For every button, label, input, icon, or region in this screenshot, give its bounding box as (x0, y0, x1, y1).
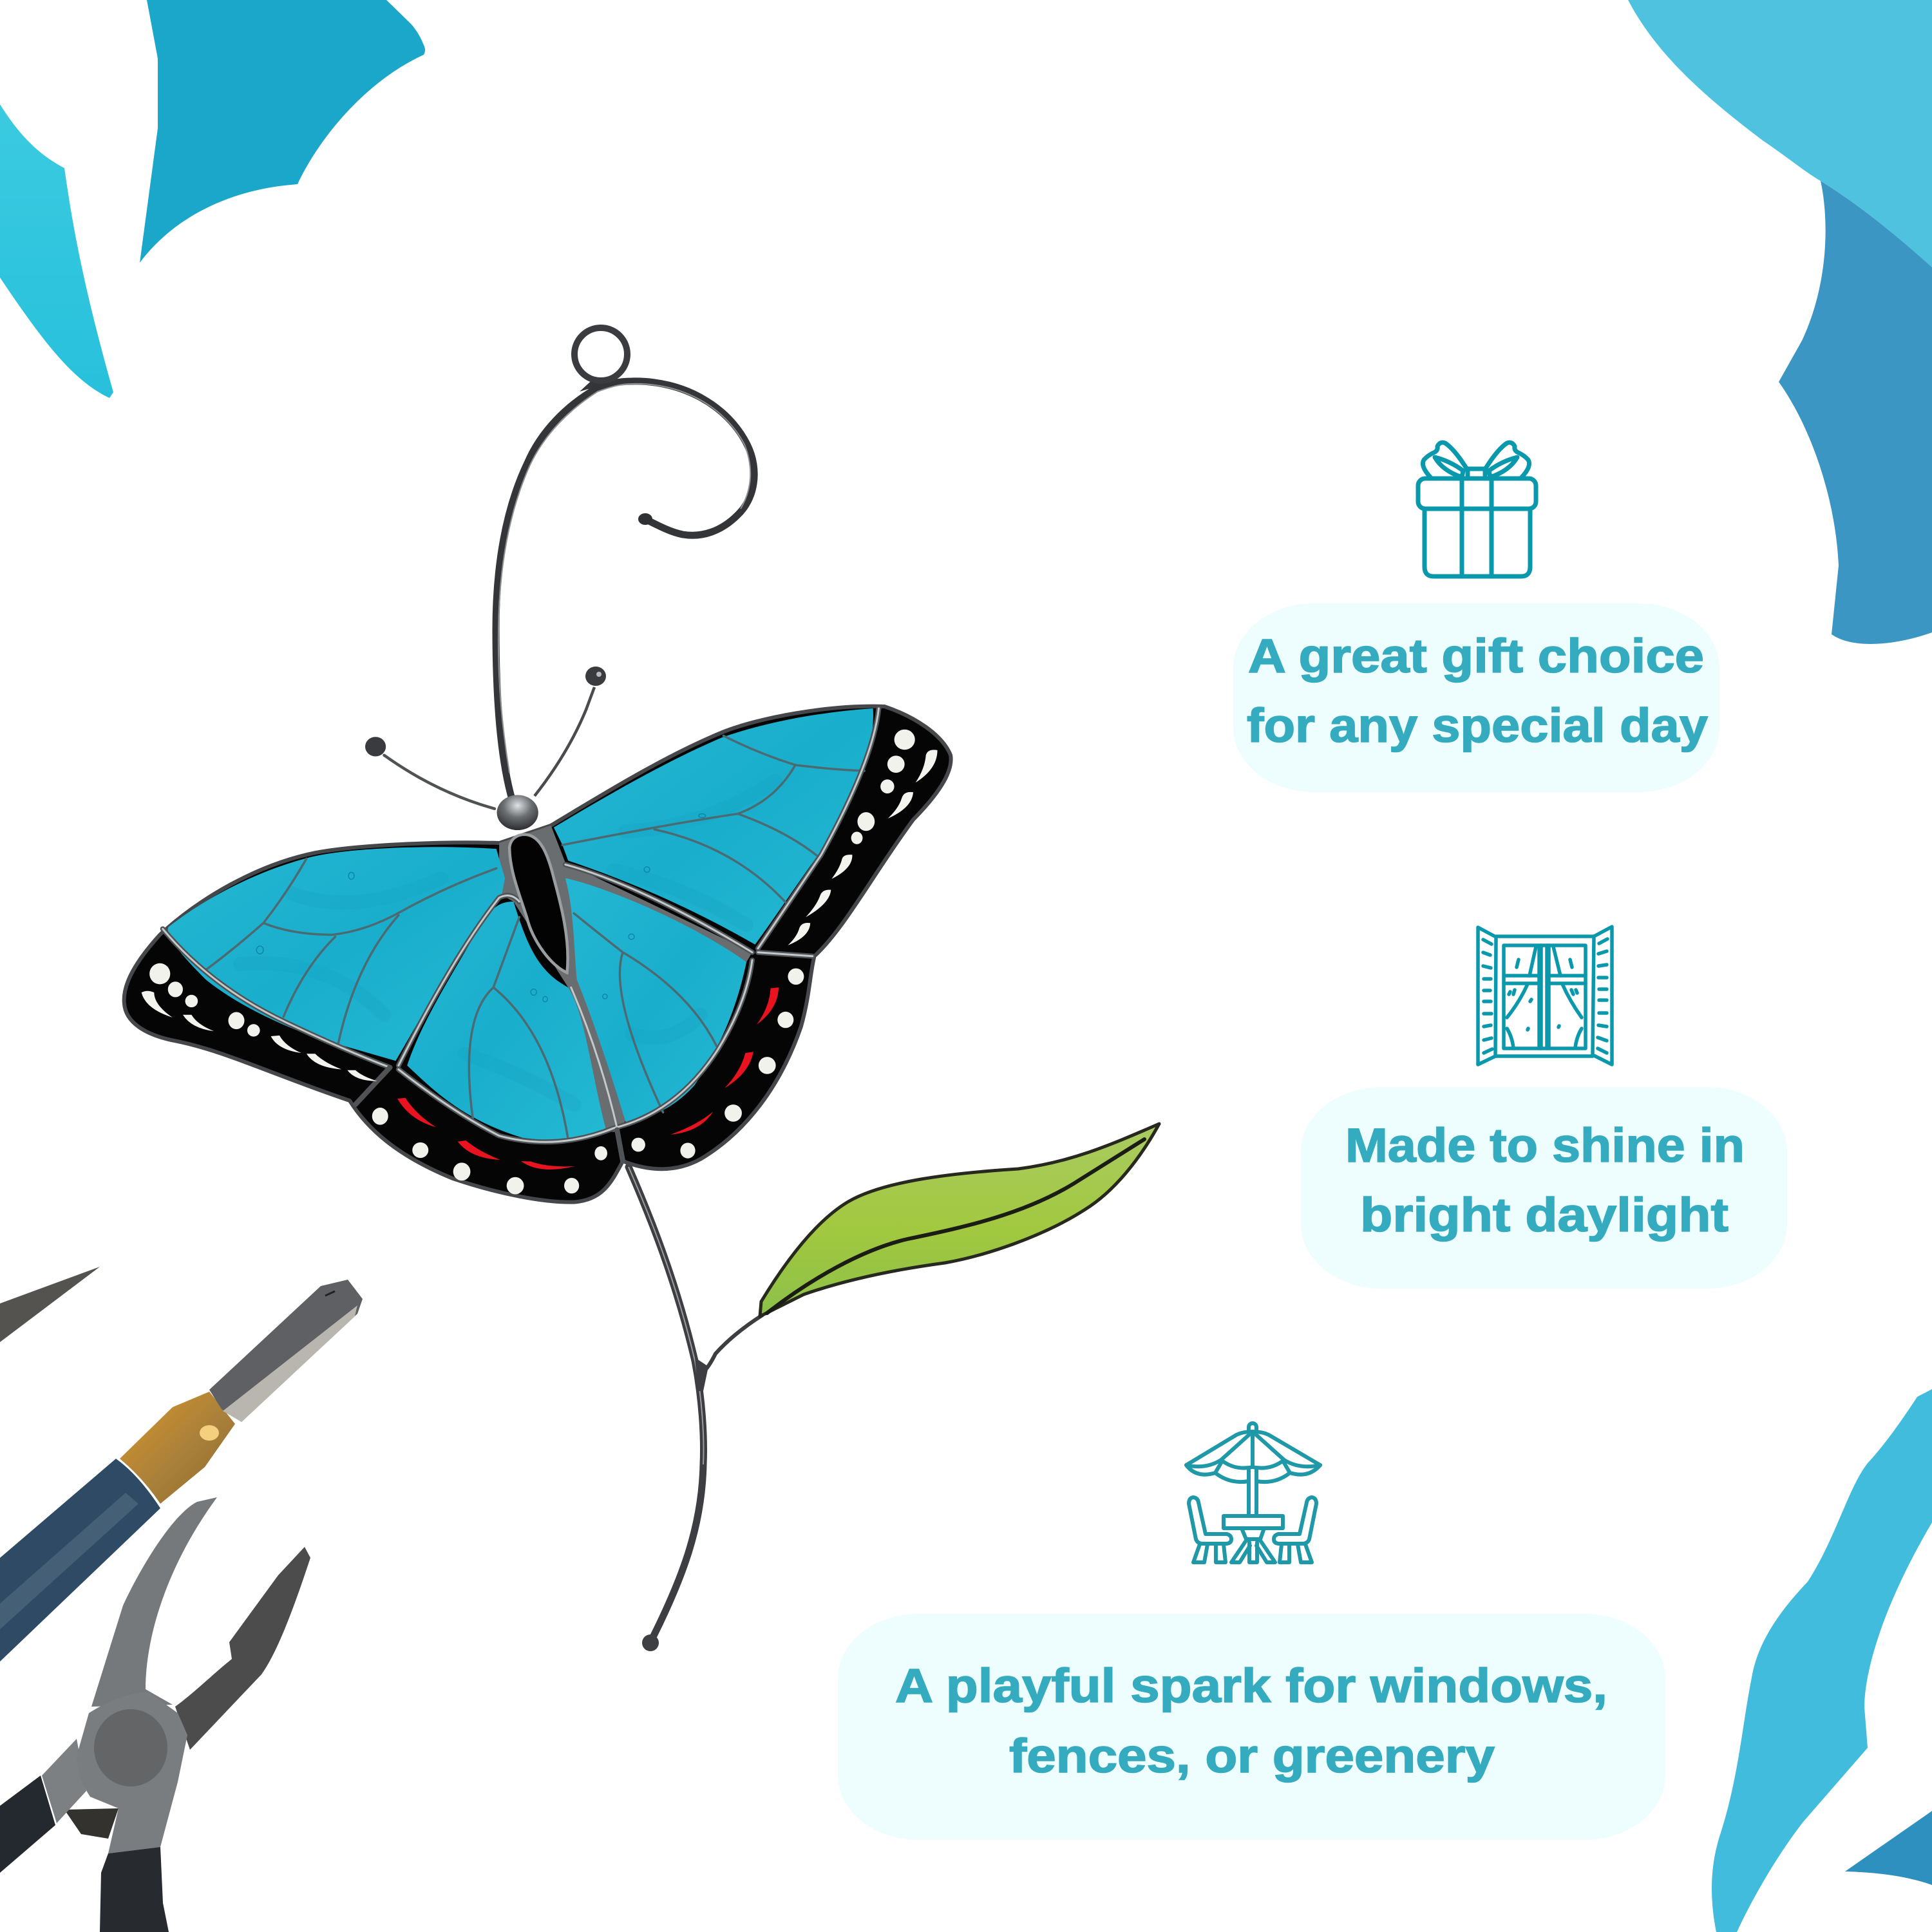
callout: gift: A great gift choice (1248, 629, 1704, 683)
glass swirls (240, 781, 775, 1104)
butterfly (124, 706, 951, 1202)
callout: gift: for any special day (1247, 699, 1708, 752)
stem tip (642, 1634, 659, 1651)
pliers spring (64, 1808, 118, 1839)
hook ring (574, 328, 627, 381)
cutter handle (0, 1459, 160, 1662)
left antenna (365, 737, 495, 809)
hook tip (638, 513, 652, 525)
pliers lower jaw (175, 1547, 310, 1750)
right forewing glass (554, 708, 873, 945)
lead came lines (163, 708, 878, 1161)
leaf vein (767, 1139, 1144, 1313)
callout: daylight (1301, 1087, 1787, 1289)
callout: windows (838, 1614, 1665, 1840)
left forewing glass (168, 847, 505, 1061)
callout: windows: fences, or greenery (1009, 1729, 1495, 1783)
tool: glass cutter (0, 1280, 363, 1662)
leaf (760, 1124, 1159, 1316)
right antenna (535, 667, 606, 796)
glass shard: bottom right dark (1845, 1811, 1932, 1885)
glass shard: top left (140, 0, 425, 263)
cutter tip (209, 1280, 363, 1422)
butterfly body (509, 835, 568, 972)
white wing dots (149, 730, 915, 1194)
pliers head (77, 1692, 187, 1853)
red wing dashes (397, 987, 779, 1170)
tool: pliers (0, 1497, 310, 1932)
pliers left joint (42, 1739, 86, 1823)
glass shard: bottom right light (1712, 1389, 1932, 1932)
butterfly head (497, 795, 538, 830)
callout: windows: A playful spark for windows, (895, 1659, 1607, 1712)
lead backing between wings (499, 826, 752, 1132)
glass shard: top right light (1628, 0, 1932, 267)
hanging hook (496, 328, 754, 799)
icon: window (1478, 927, 1612, 1065)
icon: gift box (1418, 442, 1536, 576)
wing silhouette (124, 706, 951, 1202)
callout: daylight: bright daylight (1360, 1188, 1728, 1242)
callout: gift (1233, 603, 1719, 792)
glass shard: top right dark (1779, 181, 1932, 644)
white wing dashes (142, 750, 938, 1081)
pliers pivot (94, 1709, 167, 1786)
tool: glass knife blade (0, 1267, 100, 1342)
icon: patio umbrella and chairs (1186, 1423, 1320, 1562)
wing veins (206, 735, 864, 1140)
pliers upper jaw (91, 1497, 217, 1707)
callout: daylight: Made to shine in (1345, 1119, 1745, 1172)
pliers left handle (0, 1776, 55, 1873)
left hindwing glass (407, 902, 605, 1141)
glass shard: far left (0, 104, 113, 398)
stem (629, 1167, 762, 1651)
pliers lower handle (100, 1847, 169, 1932)
stem branch (703, 1315, 762, 1372)
right hindwing glass (565, 878, 746, 1122)
cutter ferrule (120, 1392, 235, 1504)
